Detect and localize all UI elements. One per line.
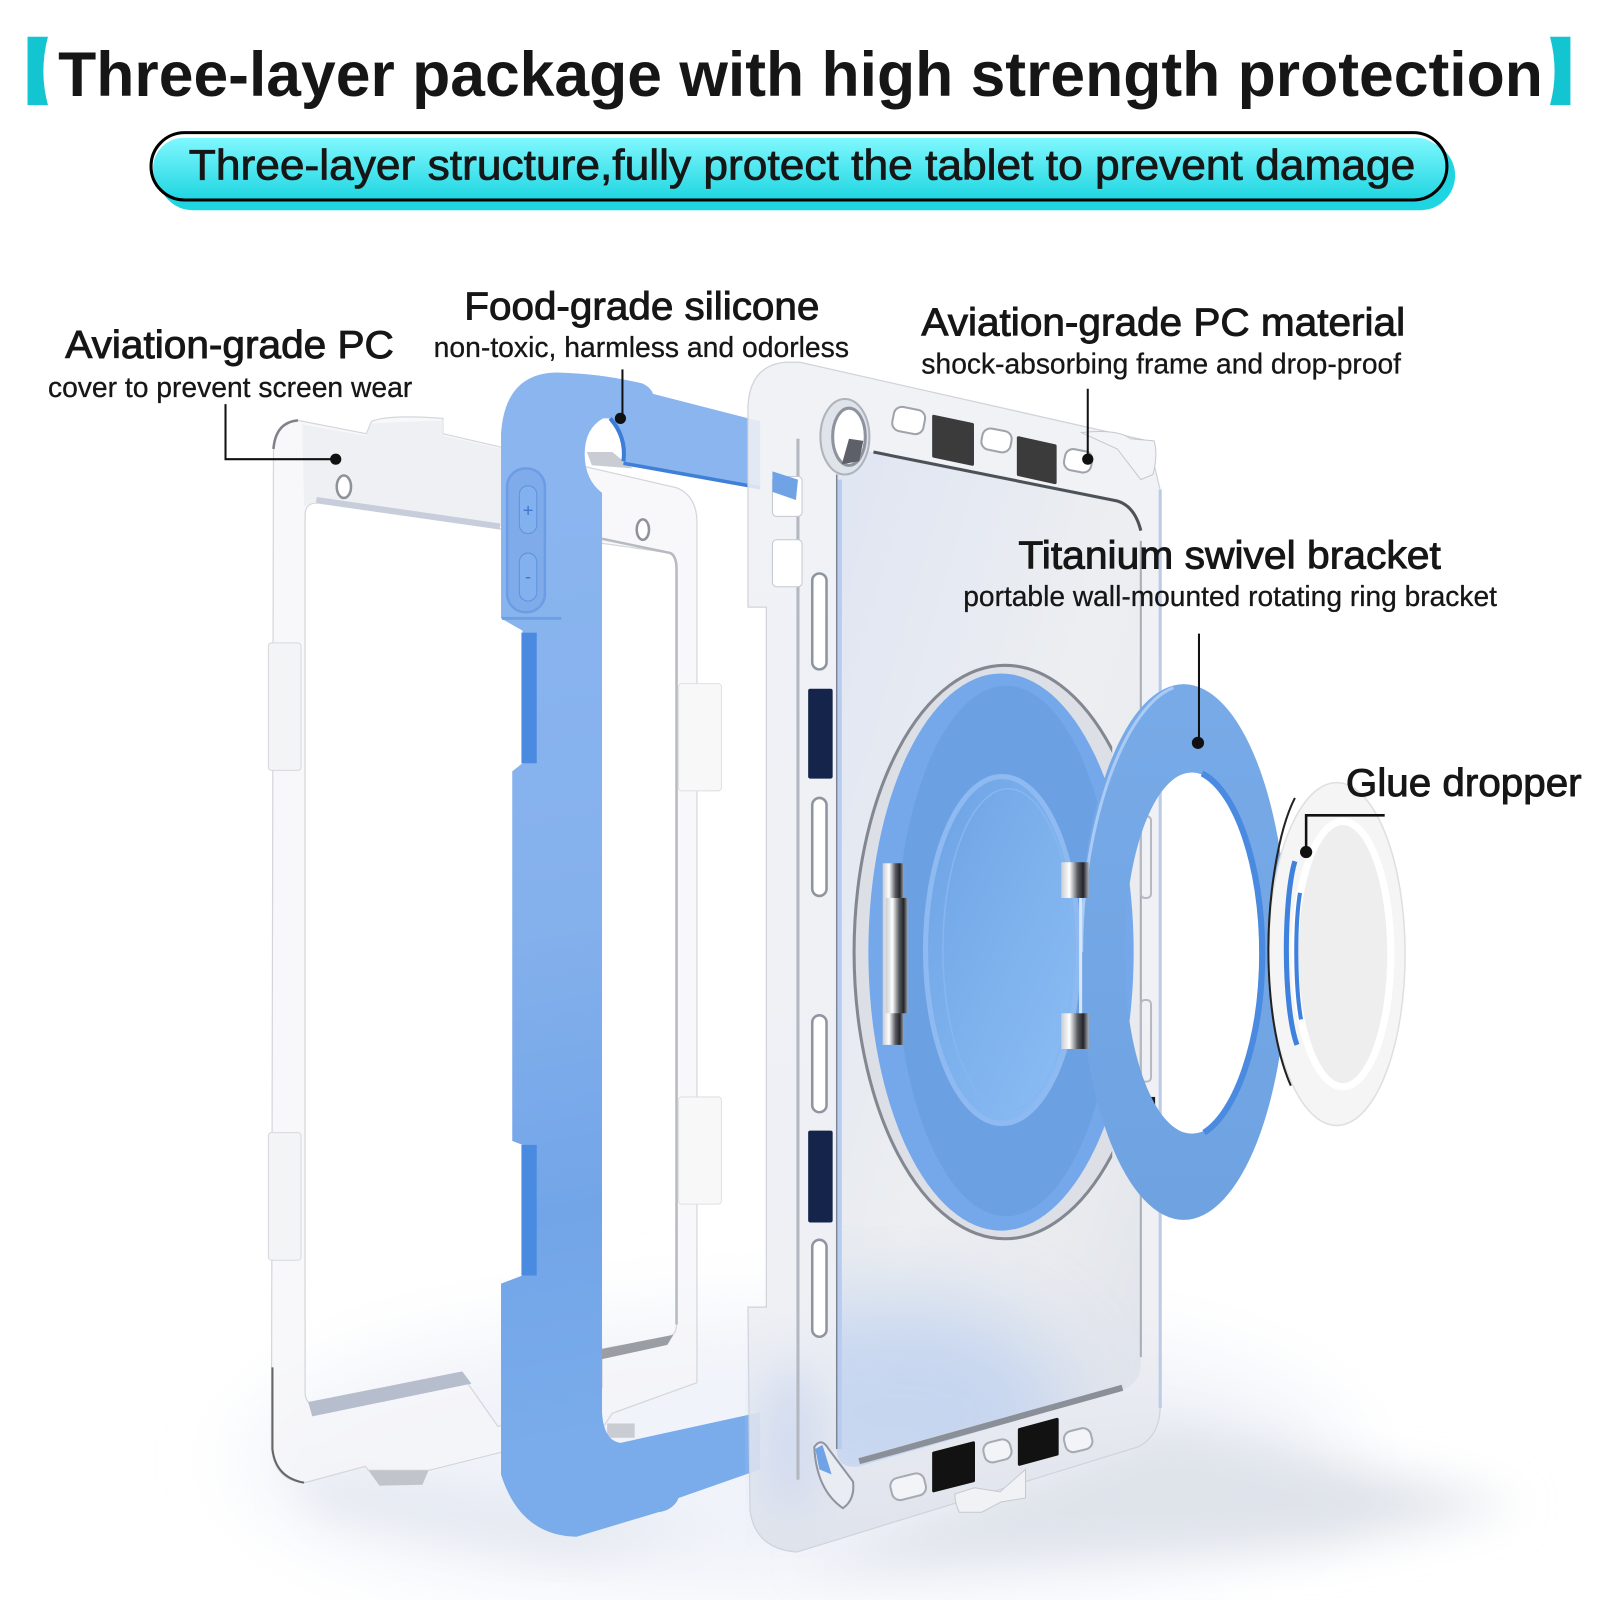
titanium ring [1080,684,1288,1220]
volume minus [519,553,537,601]
cover right side tab upper [679,684,721,791]
label: aviation-grade PC material: Aviation-grade PC material [921,302,1405,345]
inner oval line [943,789,1073,1111]
silicone ledge [502,617,561,620]
volume plus [519,486,537,534]
case top ear [1082,431,1156,480]
label: titanium swivel bracket [963,534,1497,613]
right rail dark pads [1145,786,1155,1117]
glue black edge [1268,798,1295,1086]
leader: PC material [1082,389,1093,465]
cover bottom clip [368,1470,429,1486]
case outer shell [748,362,1160,1552]
clear back case [724,362,1160,1552]
cover inner clip [587,452,633,468]
glue body [1268,783,1405,1126]
volume minus: - [525,566,531,587]
disc blue band [868,673,1134,1231]
case right rail line [1140,541,1142,1357]
silicone main frame [501,372,760,1537]
glue blue arc outer [1286,861,1297,1045]
disc blue body [896,686,1116,1216]
left rail slots [812,573,827,1337]
case panel bottom band [859,1388,1122,1461]
silicone top bar underside [623,463,760,488]
label: glue dropper: Glue dropper [1346,762,1582,805]
subtitle: Three-layer structure,fully protect the tablet to prevent damage [189,142,1415,190]
case right blue edge [1159,490,1162,1408]
subtitle pill [151,133,1455,210]
cover lower clip [607,1423,635,1438]
cover body [271,417,697,1483]
leader: glue dropper [1300,815,1385,858]
blue silicone frame [501,372,760,1537]
case panel left stripe [838,480,842,1449]
silicone cutout lip [610,418,624,461]
rotating disc [854,665,1156,1239]
leader: food-grade silicone [615,369,626,424]
left clear PC cover frame [268,417,721,1486]
inner oval [926,777,1079,1123]
silicone inner strip upper [521,633,537,763]
case left rail line [796,439,799,1480]
case lower flap haze [762,1362,819,1515]
bottom rail holes [889,1426,1094,1502]
case panel left line [836,474,838,1449]
disc clear rim [852,664,1112,1240]
title: Three-layer package with high strength protection [58,40,1543,110]
bottom clip [955,1469,1026,1512]
cover top rail band [316,500,500,527]
right rail slots [1141,816,1151,1082]
silicone inner strip lower [521,1145,537,1276]
cover right side tab lower [679,1097,721,1204]
right hinge upper [1061,862,1089,898]
cover screw hole left [337,476,351,498]
case inner panel [837,445,1141,1467]
case inner panel blue haze [836,1267,1088,1467]
left rail dark pads [808,689,833,1222]
cover left side tab upper [268,643,301,770]
top rail black pads [934,416,1055,483]
label: titanium swivel bracket: Titanium swivel bracket [1018,534,1441,577]
volume plus: + [523,499,533,520]
glue blue arc inner [1296,893,1301,1019]
right hinge lower [1061,1013,1089,1049]
leader: titanium bracket [1192,634,1204,749]
label: aviation-grade PC material [921,302,1405,380]
leader: aviation-grade PC [226,404,341,465]
ring body [1080,684,1288,1220]
bottom black pads [934,1419,1057,1491]
title bracket left [28,37,48,105]
cover bottom right band [602,1335,673,1359]
title bracket right [1550,37,1570,105]
description: cover to prevent screen wear [48,372,413,404]
left flap windows [772,471,802,587]
description: shock-absorbing frame and drop-proof [921,348,1401,380]
bottom corner hole [814,1442,853,1508]
glue white ring [1295,821,1391,1087]
button housing [507,468,545,612]
description: non-toxic, harmless and odorless [434,332,849,364]
cover screw hole right [637,519,649,540]
cover left side tab lower [268,1133,301,1260]
glue dropper disc [1268,783,1405,1126]
label: food-grade silicone: Food-grade silicone [464,285,819,328]
label: aviation-grade PC [48,324,413,404]
cover left edge lower [272,1367,304,1483]
cover left edge glass [273,420,298,449]
floor shadow [245,1316,1520,1600]
cover right rail band [602,539,677,1324]
label: food-grade silicone [434,285,849,364]
cover bottom window band [308,1371,471,1416]
description: portable wall-mounted rotating ring bracket [963,581,1497,613]
ring left highlight [1082,688,1173,952]
case camera ring [820,399,869,474]
cover top rail [302,420,502,527]
case panel top band [873,452,1141,531]
top rail holes [891,405,1094,474]
hinge seam [1079,898,1082,1013]
label: aviation-grade PC: Aviation-grade PC [65,324,394,367]
ring inner bevel [1202,773,1262,1133]
left hinge [883,863,908,1045]
